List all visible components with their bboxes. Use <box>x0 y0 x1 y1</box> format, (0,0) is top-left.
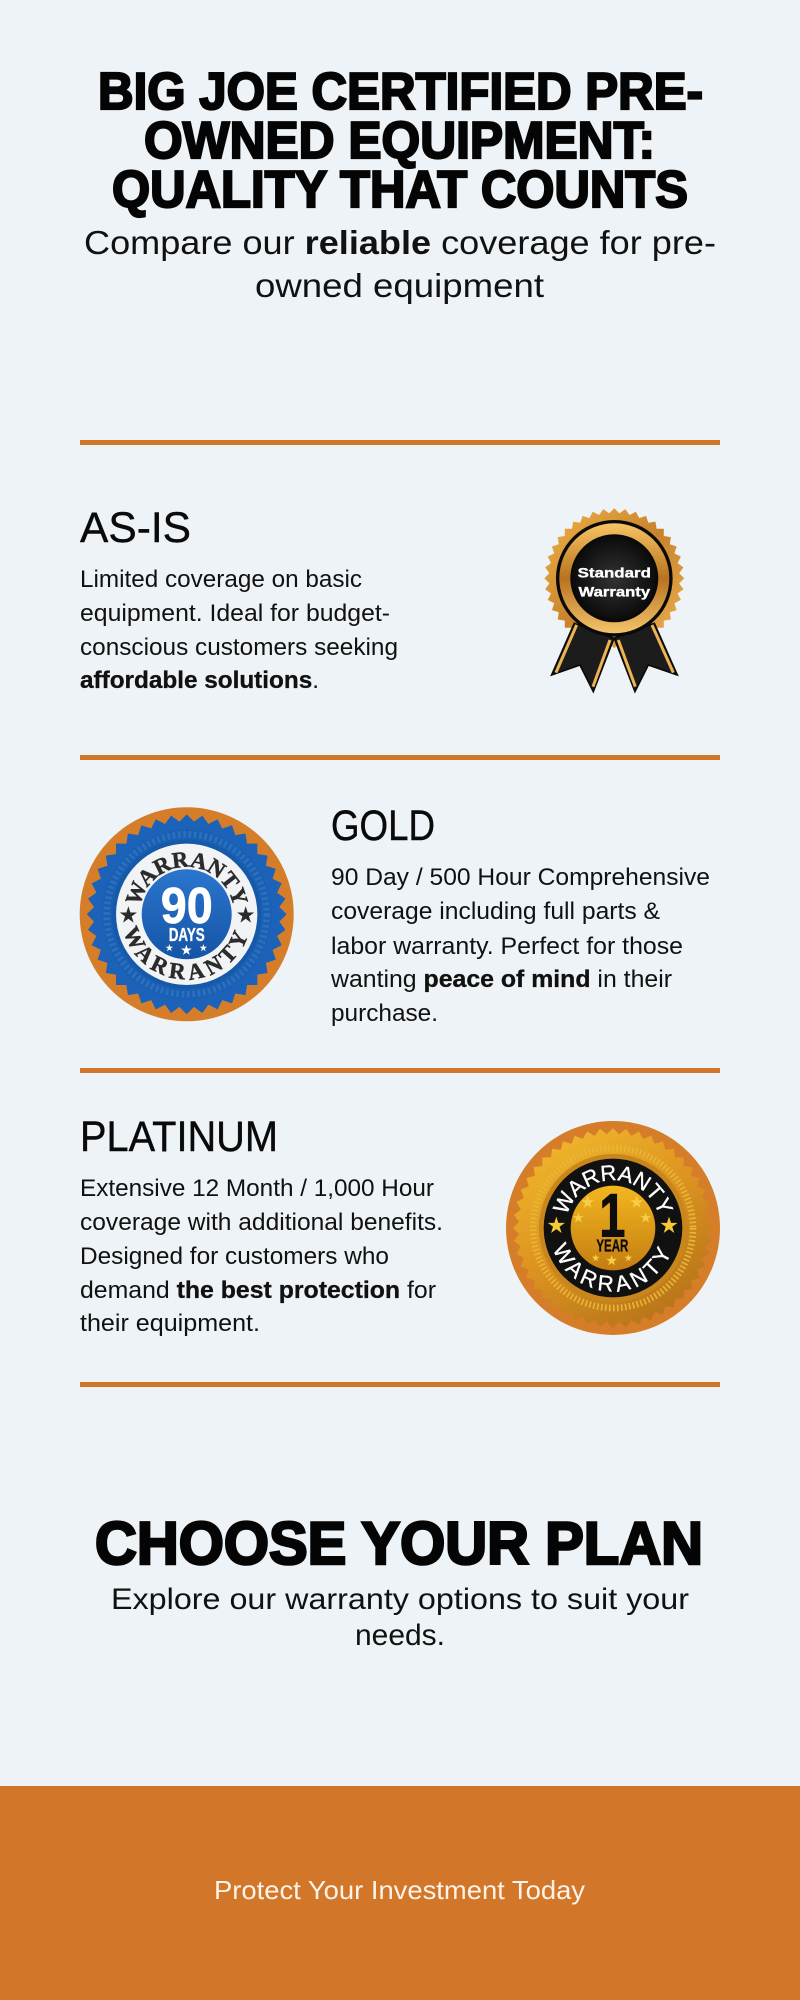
text block: platinum description: coverage with additional benefits. <box>80 1209 443 1236</box>
icon: 90 days warranty badge: WARRANTY <box>125 924 248 980</box>
text block: gold description: purchase. <box>331 1000 438 1027</box>
text block: as-is description: conscious customers seeking <box>80 634 398 661</box>
text block: gold description: labor warranty. Perfect for those <box>331 933 683 960</box>
text block: gold description: coverage including full parts & <box>331 898 660 925</box>
title: OWNED EQUIPMENT: <box>144 112 655 170</box>
title <box>98 63 703 219</box>
icon: 90 days warranty badge: DAYS <box>169 924 205 945</box>
heading: as-is: AS-IS <box>80 504 191 552</box>
text block: gold description: 90 Day / 500 Hour Comprehensive <box>331 864 710 891</box>
heading: platinum: PLATINUM <box>80 1113 278 1161</box>
icon: 1 year warranty badge: WARRANTY <box>554 1241 669 1292</box>
text block: as-is description: affordable solutions. <box>80 667 319 694</box>
icon: 1 year warranty badge: WARRANTY <box>552 1165 674 1212</box>
text block: as-is description: Limited coverage on basic <box>80 566 362 593</box>
icon: 90 days warranty badge: WARRANTY <box>125 852 248 904</box>
icon: standard warranty ribbon badge: Standard <box>578 564 651 580</box>
text block: explore options <box>111 1583 689 1652</box>
panel: platinum <box>80 1113 720 1337</box>
text block: explore options: Explore our warranty options to suit your <box>111 1583 689 1616</box>
panel: as-is <box>80 504 686 694</box>
icon: standard warranty ribbon badge <box>543 507 686 692</box>
icon: 1 year warranty badge: YEAR <box>596 1236 628 1256</box>
text block: gold description: wanting peace of mind in their <box>330 966 672 993</box>
icon: 1 year warranty badge <box>506 1121 720 1335</box>
text block: platinum description: their equipment. <box>80 1310 260 1337</box>
footer band <box>0 1786 800 2000</box>
title: BIG JOE CERTIFIED PRE- <box>98 63 703 121</box>
text block: platinum description: Extensive 12 Month / 1,000 Hour <box>80 1175 434 1202</box>
text block: explore options: needs. <box>355 1619 445 1652</box>
heading: gold: GOLD <box>331 802 435 850</box>
footer text: Protect Your Investment Today <box>214 1875 585 1905</box>
subtitle <box>84 224 716 304</box>
subtitle: Compare our reliable coverage for pre- <box>84 224 716 261</box>
title: QUALITY THAT COUNTS <box>112 161 688 219</box>
text block: gold description <box>330 864 710 1027</box>
text block: platinum description: Designed for customers who <box>80 1243 389 1270</box>
icon: 1 year warranty badge: 1 <box>599 1181 625 1250</box>
icon: 90 days warranty badge: 90 <box>161 877 213 934</box>
text block: as-is description: equipment. Ideal for budget- <box>80 600 390 627</box>
text block: platinum description <box>80 1175 443 1337</box>
text block: platinum description: demand the best protection for <box>80 1277 436 1304</box>
heading: choose your plan: CHOOSE YOUR PLAN <box>95 1510 703 1577</box>
icon: standard warranty ribbon badge: Warranty <box>578 584 650 600</box>
text block: as-is description <box>80 566 398 694</box>
subtitle: owned equipment <box>255 267 544 304</box>
panel: gold <box>80 802 710 1027</box>
icon: 90 days warranty badge <box>80 807 294 1022</box>
